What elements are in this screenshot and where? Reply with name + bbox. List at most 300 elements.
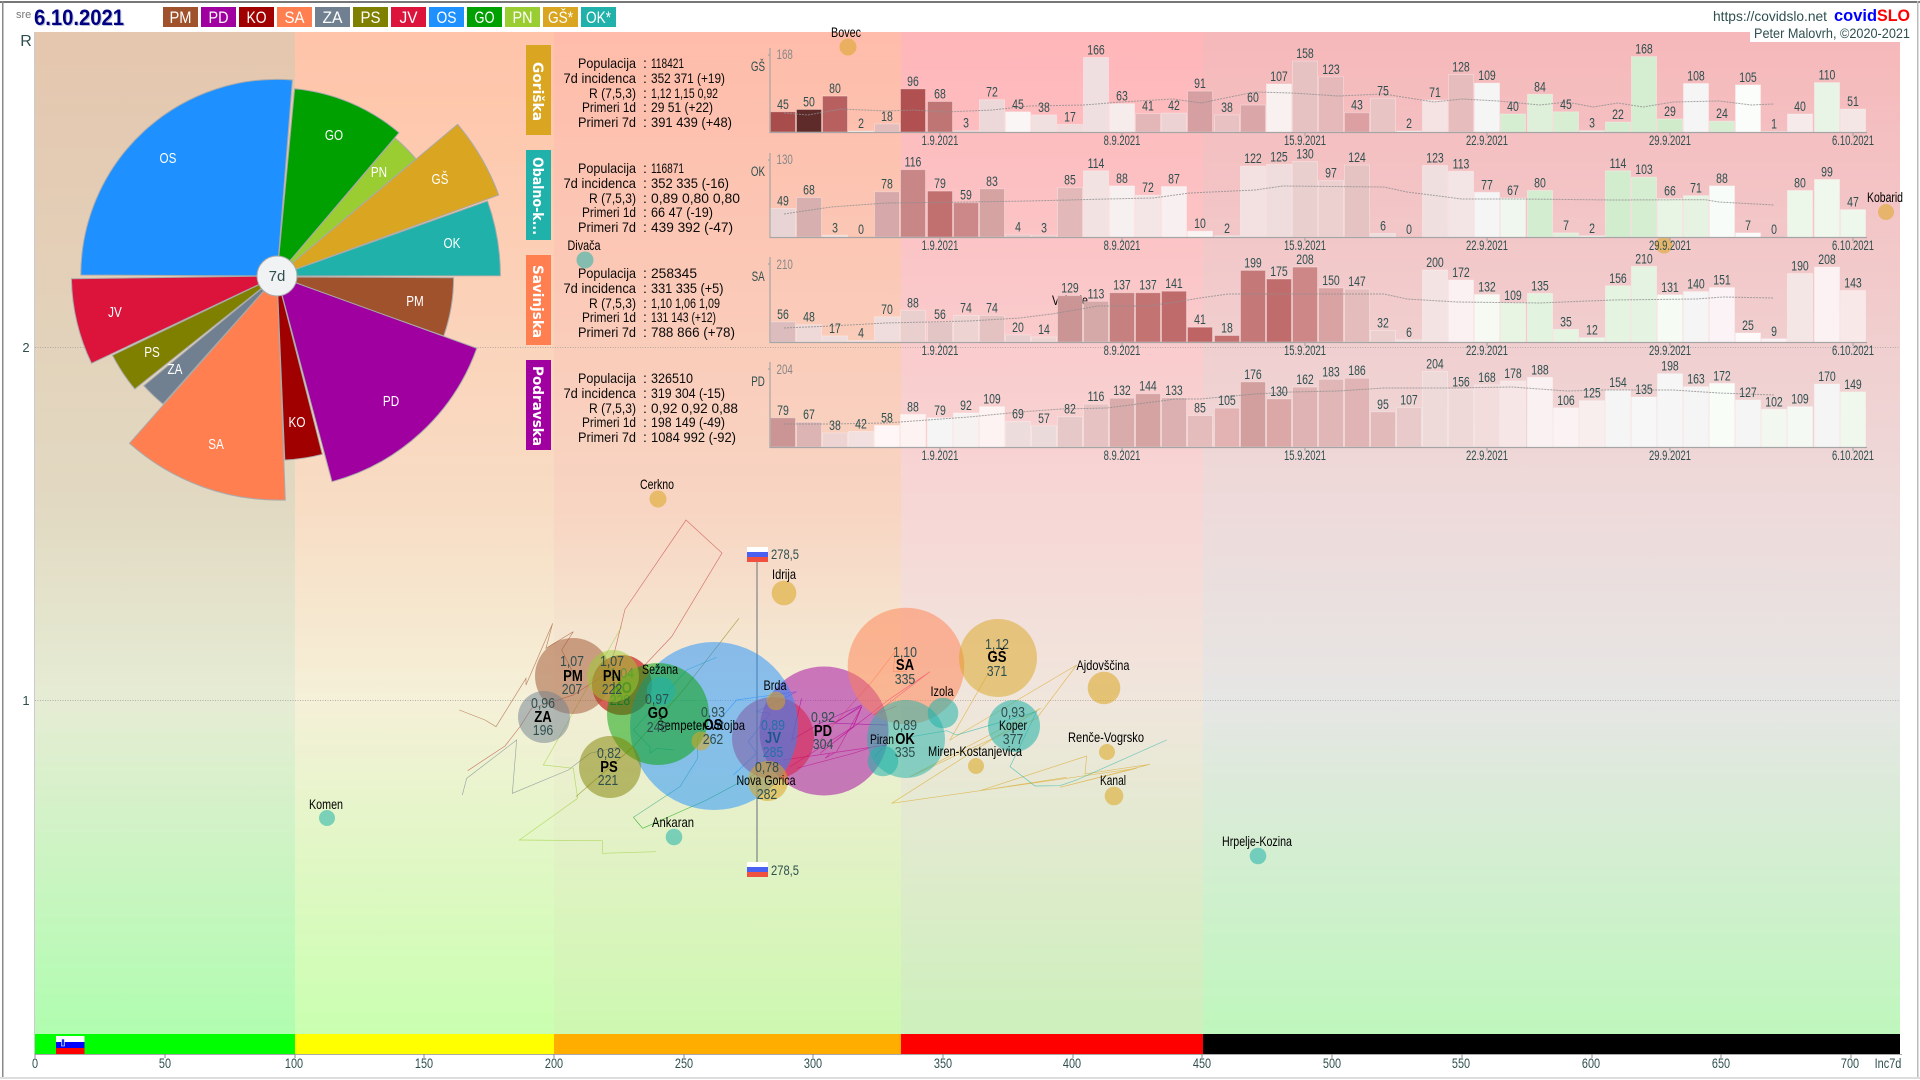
bar chart: OK: 130 [1296,146,1314,162]
legend: regions: PD [208,8,228,27]
scatter: region bubble labels: 335 [895,671,915,687]
scatter: region bubble labels: 0,89 [893,717,917,733]
bar chart: PD: 178 [1504,366,1522,381]
bar chart: OK: 7 [1563,217,1569,233]
scatter: region bubble labels: OK [895,731,915,748]
bar chart: PD: 183 [1322,364,1340,380]
bar chart: PD: 42 [855,416,867,432]
stats: Goriška: 29 51 (+22) [651,99,713,115]
bar chart: GŠ: 80 [829,81,841,96]
bar chart: GŠ: 166 [1087,42,1105,58]
stats: Obalno-kraška: : [643,175,647,191]
scatter: region bubble labels: GO [648,705,668,722]
bar chart: GŠ: 123 [1322,61,1340,77]
bar chart: PD: 79 [934,402,946,418]
bar chart: GŠ: 84 [1534,79,1546,95]
scatter: municipality labels: Hrpelje-Kozina [1222,833,1292,849]
bar chart: GŠ: 8.9.2021 [1104,133,1140,148]
bar chart: SA: 17 [829,320,841,336]
stats: Goriška: : [643,55,647,71]
scatter: region bubble labels: 335 [895,744,915,760]
bar chart: SA: 18 [1221,320,1233,336]
scatter: municipality labels: Sežana [642,661,678,677]
bar chart: GŠ: 91 [1194,76,1206,91]
bar chart: PD: 133 [1165,382,1183,398]
bar chart: GŠ: 50 [803,94,815,110]
scatter: region bubble labels: ZA [534,709,552,726]
bar chart: PD: 69 [1012,406,1024,422]
bar chart: SA: 4 [858,325,864,341]
x axis: 250 [675,1056,693,1071]
stats: Goriška: 352 371 (+19) [651,70,725,86]
x axis: 500 [1323,1056,1341,1071]
scatter: JV label: 285 [763,744,783,760]
scatter: municipality labels: Ankaran [652,814,694,830]
stats: Podravska: : [643,385,647,401]
x axis: 0 [32,1056,38,1071]
bar chart: SA: 137 [1113,277,1131,293]
bar chart: OK: 15.9.2021 [1284,238,1326,253]
region tag: Savinjska: Savinjska [529,265,545,338]
bar chart: PD: 186 [1348,363,1366,379]
attribution: SLO [1877,6,1910,25]
scatter: national average line [747,546,799,878]
scatter: municipality trajectories [459,520,887,853]
bar chart: OK: 59 [960,187,972,203]
bar chart: SA: 35 [1560,314,1572,330]
bar chart: PD: 85 [1194,400,1206,416]
bar chart: OK: 97 [1325,165,1337,181]
stats: Podravska: Primeri 1d [582,414,636,430]
scatter: region bubble labels: GŠ [988,647,1007,666]
bar chart: OK: 67 [1507,183,1519,198]
bar chart: OK: 77 [1481,177,1493,193]
rose chart: 7d incidence by region: JV [108,304,122,320]
bar chart: SA: 25 [1742,318,1754,333]
bar chart: GŠ: GŠ [751,57,765,74]
R axis and reference lines: 2 [22,340,30,355]
legend: regions: PN [512,8,532,27]
scatter: region bubble labels: OS [704,717,723,734]
bar chart: OK: 80 [1794,175,1806,191]
stats: Obalno-kraška: Primeri 1d [582,204,636,220]
bar chart: PD: 88 [907,399,919,415]
bar chart: PD: 6.10.2021 [1832,448,1874,463]
bar chart: PD: 168 [1478,369,1496,385]
scatter: PD and JV bubbles [732,666,888,796]
bar chart: GŠ: 6.10.2021 [1832,133,1874,148]
region tag: Podravska: Podravska [529,366,545,446]
stats: Savinjska: R (7,5,3) [589,295,636,311]
bar chart: PD: 15.9.2021 [1284,448,1326,463]
stats: Podravska: 7d incidenca [564,385,636,401]
bar chart: SA: 175 [1270,264,1288,279]
rose chart: 7d incidence by region [71,79,500,500]
scatter: municipality labels: Šempeter-Vrtojba [657,717,745,733]
bar chart: SA: 48 [803,309,815,325]
stats: Podravska: : [643,429,647,445]
bar chart: GŠ: 42 [1168,98,1180,113]
stats: Obalno-kraška: Populacija [578,160,636,176]
bar chart: SA: 29.9.2021 [1649,343,1691,358]
scatter: region bubble labels: 304 [813,736,834,752]
bar chart: SA: 190 [1791,258,1809,274]
bar chart: OK: 72 [1142,180,1154,196]
stats: Podravska: : [643,370,647,386]
region tag: Goriška: Goriška [529,62,545,121]
bar chart: GŠ: 3 [963,115,969,131]
stats: Podravska: 326510 [651,370,693,386]
bar chart: SA: 208 [1296,252,1314,267]
legend: regions: GO [474,8,494,27]
stats: Obalno-kraška: 0,89 0,80 0,80 [651,190,740,206]
stats: Podravska: 198 149 (-49) [651,414,725,430]
stats: Obalno-kraška: 352 335 (-16) [651,175,729,191]
bar chart: PD: 79 [777,402,789,418]
bar chart: PD: 92 [960,398,972,413]
bar chart: OK: 80 [1534,175,1546,191]
bar chart: OK: 7 [1745,217,1751,233]
bar chart: SA: 32 [1377,315,1389,331]
scatter: region bubble labels: 0,93 [1001,704,1025,720]
scatter: municipality labels: Komen [309,796,343,812]
bar chart: SA: 15.9.2021 [1284,343,1326,358]
rose chart: 7d incidence by region: OS [160,150,176,166]
bar chart: OK: 114 [1088,155,1104,171]
bar chart: SA: 41 [1194,312,1206,328]
bar chart: OK: OK [751,163,765,179]
bar chart: OK: 6.10.2021 [1832,238,1874,253]
x axis: 50 [159,1056,171,1071]
bar chart: PD: 127 [1739,385,1757,400]
scatter: region bubble labels: PN [603,668,621,685]
bar chart: SA: 56 [777,306,789,322]
stats: Obalno-kraška: : [643,190,647,206]
bar chart: SA: 137 [1139,277,1157,293]
bar chart: OK: 4 [1015,219,1021,235]
bar chart: SA: 20 [1012,319,1024,335]
bar chart: OK: 78 [881,176,893,192]
bar chart: GŠ: 29.9.2021 [1649,133,1691,148]
x axis [32,1054,1902,1071]
region tag: Goriška [526,45,551,135]
rose chart: 7d incidence by region: GŠ [432,171,448,187]
stats: Savinjska: 131 143 (+12) [651,309,716,325]
date heading: 6.10.2021 [34,5,124,30]
rose chart centre label [257,256,297,296]
bar chart: OK: 88 [1116,170,1128,186]
bar chart: SA: 208 [1818,252,1836,267]
bar chart: PD: 144 [1139,378,1157,394]
bar chart: PD: 57 [1038,410,1050,426]
scatter: region bubble labels: PS [600,759,618,776]
region tag: Podravska [526,360,551,450]
bar chart: GŠ: 75 [1377,83,1389,99]
bar chart: OK: 1.9.2021 [922,238,958,253]
legend: regions: KO [246,8,266,27]
scatter: region bubble labels: 0,82 [597,745,621,761]
stats: Obalno-kraška: : [643,204,647,220]
bar chart: PD: 82 [1064,401,1076,417]
rose chart: 7d incidence by region: PS [144,344,160,360]
bar chart: GŠ [751,41,1874,148]
stats: Podravska: 319 304 (-15) [651,385,725,401]
bar chart: OK: 99 [1821,164,1833,180]
icon: Slovenia flag on colour bar [56,1036,84,1054]
bar chart: GŠ: 2 [1406,116,1412,131]
scatter: KO label: 1,04 [610,665,635,681]
bar chart: SA: 12 [1586,322,1598,338]
bar chart: PD: 135 [1635,382,1653,397]
bar chart: PD: 132 [1113,383,1131,399]
bar chart: GŠ: 108 [1687,68,1705,84]
scatter: municipality labels [309,24,1903,849]
scatter: municipality labels: Velenje [1052,292,1088,308]
bar chart: OK: 3 [832,220,838,236]
rose chart: 7d incidence by region: KO [289,414,305,430]
bar chart: OK: 87 [1168,171,1180,187]
bar chart: OK: 85 [1064,172,1076,188]
stats: Savinjska: 7d incidenca [564,280,636,296]
legend: regions: OK* [586,8,611,27]
scatter: municipality labels: Cerkno [640,476,674,492]
stats: Savinjska: Primeri 1d [582,309,636,325]
bar chart: SA: 74 [960,300,972,316]
bar chart: GŠ: 51 [1847,94,1859,109]
scatter: region bubble labels: 0,93 [701,704,725,720]
bar chart: GŠ: 60 [1247,90,1259,105]
bar chart: SA: 8.9.2021 [1104,343,1140,358]
bar chart: SA: 200 [1426,255,1444,270]
bar chart: SA: 1.9.2021 [922,343,958,358]
bar chart: PD: 95 [1377,396,1389,412]
bar chart: GŠ: 3 [1589,115,1595,131]
stats: Savinjska: : [643,324,647,340]
bar chart: SA: 199 [1244,255,1262,271]
scatter: region bubble labels: SA [896,657,915,674]
x axis: 700 [1841,1056,1859,1071]
bar chart: OK: 125 [1270,149,1288,165]
scatter: trajectories east side [820,652,1167,803]
bar chart: OK: 114 [1610,155,1626,171]
bar chart: GŠ: 68 [934,86,946,102]
stats: Goriška: Primeri 7d [578,114,636,130]
bar chart: SA: 6.10.2021 [1832,343,1874,358]
scatter: region bubble labels: 371 [987,663,1007,679]
x axis: 400 [1063,1056,1081,1071]
stats: Obalno-kraška [564,160,740,235]
x axis: 550 [1452,1056,1470,1071]
stats: Podravska: 0,92 0,92 0,88 [651,400,738,416]
rose chart centre label: 7d [269,268,285,285]
bar chart: PD: 105 [1218,393,1236,408]
scatter: region bubble labels: 377 [1003,731,1023,747]
bar chart: GŠ: 17 [1064,109,1076,125]
bar chart: SA: 156 [1609,270,1627,286]
bar chart: GŠ: 45 [777,96,789,112]
bar chart: SA: 172 [1452,265,1470,280]
stats: Podravska: : [643,414,647,430]
bar chart: PD: 106 [1557,392,1575,408]
scatter: municipality labels: Idrija [772,566,796,582]
scatter: municipality labels: Renče-Vogrsko [1068,729,1144,745]
bar chart: OK: 8.9.2021 [1104,238,1140,253]
scatter: region bubble labels: 248 [647,719,667,735]
bar chart: GŠ: 71 [1429,85,1441,100]
bar chart: OK: 2 [1589,220,1595,236]
bar chart: GŠ: 158 [1296,46,1314,61]
scatter: region bubble labels: 1,12 [985,636,1009,652]
bar chart: PD: 8.9.2021 [1104,448,1140,463]
stats: Savinjska: 788 866 (+78) [651,324,735,340]
bar chart: OK: 68 [803,182,815,198]
bar chart: OK: 2 [1224,220,1230,236]
scatter: region bubble labels: 1,07 [560,653,584,669]
scatter: municipality labels: Bovec [831,24,861,40]
scatter: municipality labels: Kobarid [1867,189,1903,205]
scatter: region bubble labels: 282 [757,786,777,802]
bar chart: PD: 116 [1088,389,1104,404]
legend: regions: ZA [322,8,343,27]
x axis: 650 [1712,1056,1730,1071]
legend: regions: GŠ* [548,8,573,27]
legend: regions [163,7,616,27]
bar chart: GŠ: 110 [1819,67,1835,83]
scatter: national average line: 278,5 [771,546,799,562]
bar chart: SA: 113 [1088,286,1104,302]
x axis: 300 [804,1056,822,1071]
rose chart: 7d incidence by region: PM [406,293,424,309]
bar chart: PD: 125 [1583,385,1601,401]
bar chart: OK: 124 [1348,150,1366,165]
scatter: JV label: 0,89 [761,717,785,733]
bar chart: GŠ: 38 [1221,99,1233,115]
stats: Goriška: : [643,70,647,86]
stats: Podravska: R (7,5,3) [589,400,636,416]
scatter: municipality labels: Kanal [1100,772,1126,788]
bar chart: SA: 9 [1771,323,1777,339]
bar chart: SA: 14 [1038,322,1050,337]
scatter: region bubble labels: 0,92 [811,709,835,725]
scatter: municipality labels: Brda [764,677,787,693]
bar chart: PD: 58 [881,410,893,426]
bar chart: SA: 141 [1165,276,1183,292]
bar chart: SA: 131 [1661,279,1679,295]
bar chart: PD: 67 [803,407,815,423]
bar chart: PD: 107 [1400,392,1418,408]
bar chart: SA: 6 [1406,324,1412,340]
bar chart: SA: 70 [881,301,893,317]
stats: Obalno-kraška: 66 47 (-19) [651,204,713,220]
date heading: sre [16,9,31,21]
region tag: Obalno-k.: Obalno-k... [529,157,545,235]
scatter: national average line: 278,5 [771,862,799,878]
bar chart: OK: 113 [1453,156,1469,172]
bar chart: PD: 176 [1244,366,1262,382]
scatter: KO label [610,665,635,708]
x axis: Inc7d [1875,1056,1901,1071]
bar chart: PD: 109 [983,391,1001,407]
bar chart: OK: 122 [1244,151,1262,166]
attribution: https://covidslo.net [1713,8,1827,24]
scatter: other region bubbles [518,608,1037,810]
legend: regions: SA [284,8,305,27]
bar chart: SA: SA [752,268,765,284]
bar chart: OK: 130 [777,151,793,167]
stats: Podravska: Primeri 7d [578,429,636,445]
x axis: 350 [934,1056,952,1071]
bar chart: SA: 151 [1713,272,1731,288]
bar chart: GŠ: 1.9.2021 [922,133,958,148]
bar chart: OK: 47 [1847,194,1859,210]
bar chart: OK [751,146,1874,253]
scatter: region bubble labels: Koper [999,717,1027,733]
scatter: KO bubble [592,655,652,715]
bar chart: SA: 143 [1844,275,1862,291]
bar chart: SA: 129 [1061,280,1079,296]
bar chart: PD [751,356,1874,463]
legend: regions: OS [436,8,456,27]
bar chart: PD: 38 [829,417,841,433]
stats: Obalno-kraška: 116871 [651,160,684,176]
scatter: municipality labels: Izola [930,683,954,699]
bar chart: SA [752,251,1874,358]
region tag: Savinjska [526,255,551,345]
bar chart: PD: 188 [1531,362,1549,378]
scatter: region bubble labels: Nova Gorica [736,772,796,788]
scatter: KO label: 228 [610,692,630,708]
bar chart: OK: 79 [934,176,946,191]
rose chart: 7d incidence by region: PD [383,393,399,409]
stats: Goriška: 1,12 1,15 0,92 [651,85,718,101]
bar chart: SA: 210 [777,256,793,272]
bar chart: GŠ: 168 [1635,41,1653,57]
bar chart: GŠ: 128 [1452,59,1470,75]
legend: regions: JV [400,8,418,27]
bar chart: GŠ: 15.9.2021 [1284,133,1326,148]
bar chart: OK: 22.9.2021 [1466,238,1508,253]
x axis: 200 [545,1056,563,1071]
bar chart: GŠ: 43 [1351,97,1363,113]
bar chart: OK: 6 [1380,218,1386,234]
bar chart: PD: 163 [1687,371,1705,387]
rose chart: 7d incidence by region: ZA [168,361,183,377]
bar chart: SA: 56 [934,306,946,322]
bar chart: PD: PD [751,373,765,389]
bar chart: PD: 172 [1713,368,1731,384]
bar chart: GŠ: 41 [1142,98,1154,114]
stats: Savinjska: : [643,309,647,325]
region tag: Obalno-k. [526,150,551,240]
bar chart: PD: 204 [777,361,793,377]
stats: Obalno-kraška: : [643,160,647,176]
stats: Podravska [564,370,738,445]
rose chart: 7d incidence by region: SA [208,436,224,452]
stats: Goriška: 118421 [651,55,684,71]
scatter: region bubble labels: 0,97 [645,691,669,707]
stats: Goriška: Primeri 1d [582,99,636,115]
stats: Savinjska: Primeri 7d [578,324,636,340]
bar chart: PD: 198 [1661,358,1679,374]
stats: Podravska: 1084 992 (-92) [651,429,736,445]
bar chart: GŠ: 40 [1794,99,1806,114]
bar chart: SA: 88 [907,295,919,311]
bar chart: GŠ: 2 [858,116,864,131]
stats: Goriška: Populacija [578,55,636,71]
bar chart: GŠ: 18 [881,108,893,124]
scatter: region bubble labels: 221 [598,772,618,788]
bar chart: PD: 204 [1426,356,1444,372]
